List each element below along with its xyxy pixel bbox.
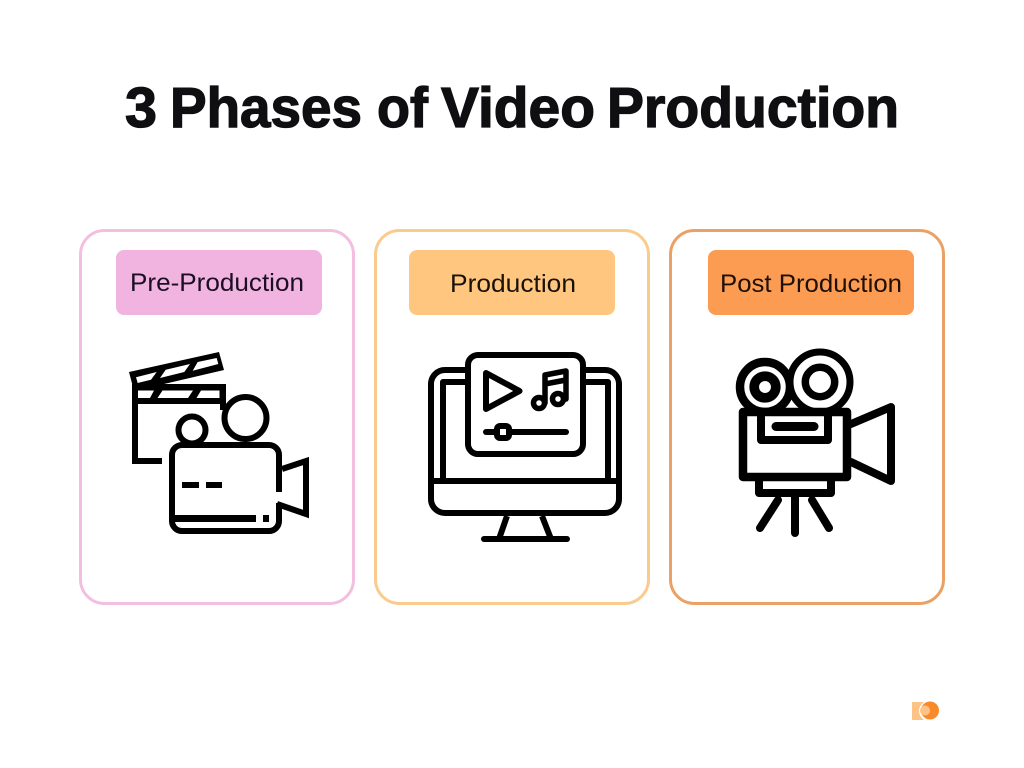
title: Production	[607, 76, 899, 140]
title: 3	[125, 76, 157, 140]
icon: brand logo	[912, 702, 939, 720]
icon: clapperboard and camera	[129, 352, 306, 531]
label: production	[409, 250, 615, 315]
label: pre-production: Pre-Production	[130, 269, 304, 297]
clapper stick	[129, 352, 224, 391]
title: Video	[441, 76, 595, 140]
title	[125, 76, 899, 140]
icon: monitor with media player	[431, 355, 619, 539]
label: pre-production	[116, 250, 322, 315]
icon: film camera on tripod	[740, 352, 891, 533]
panel: post production	[670, 230, 944, 604]
clapper board	[132, 384, 226, 464]
title: Phases	[170, 76, 362, 140]
label: production: Production	[450, 270, 576, 298]
title: of	[377, 76, 429, 140]
label: post production: Post Production	[720, 270, 902, 298]
label: post production	[708, 250, 914, 315]
card outline: post production	[670, 230, 944, 604]
panel: production	[376, 230, 648, 604]
panel: pre-production	[80, 230, 354, 604]
card outline: production	[376, 230, 648, 604]
card outline: pre-production	[80, 230, 354, 604]
